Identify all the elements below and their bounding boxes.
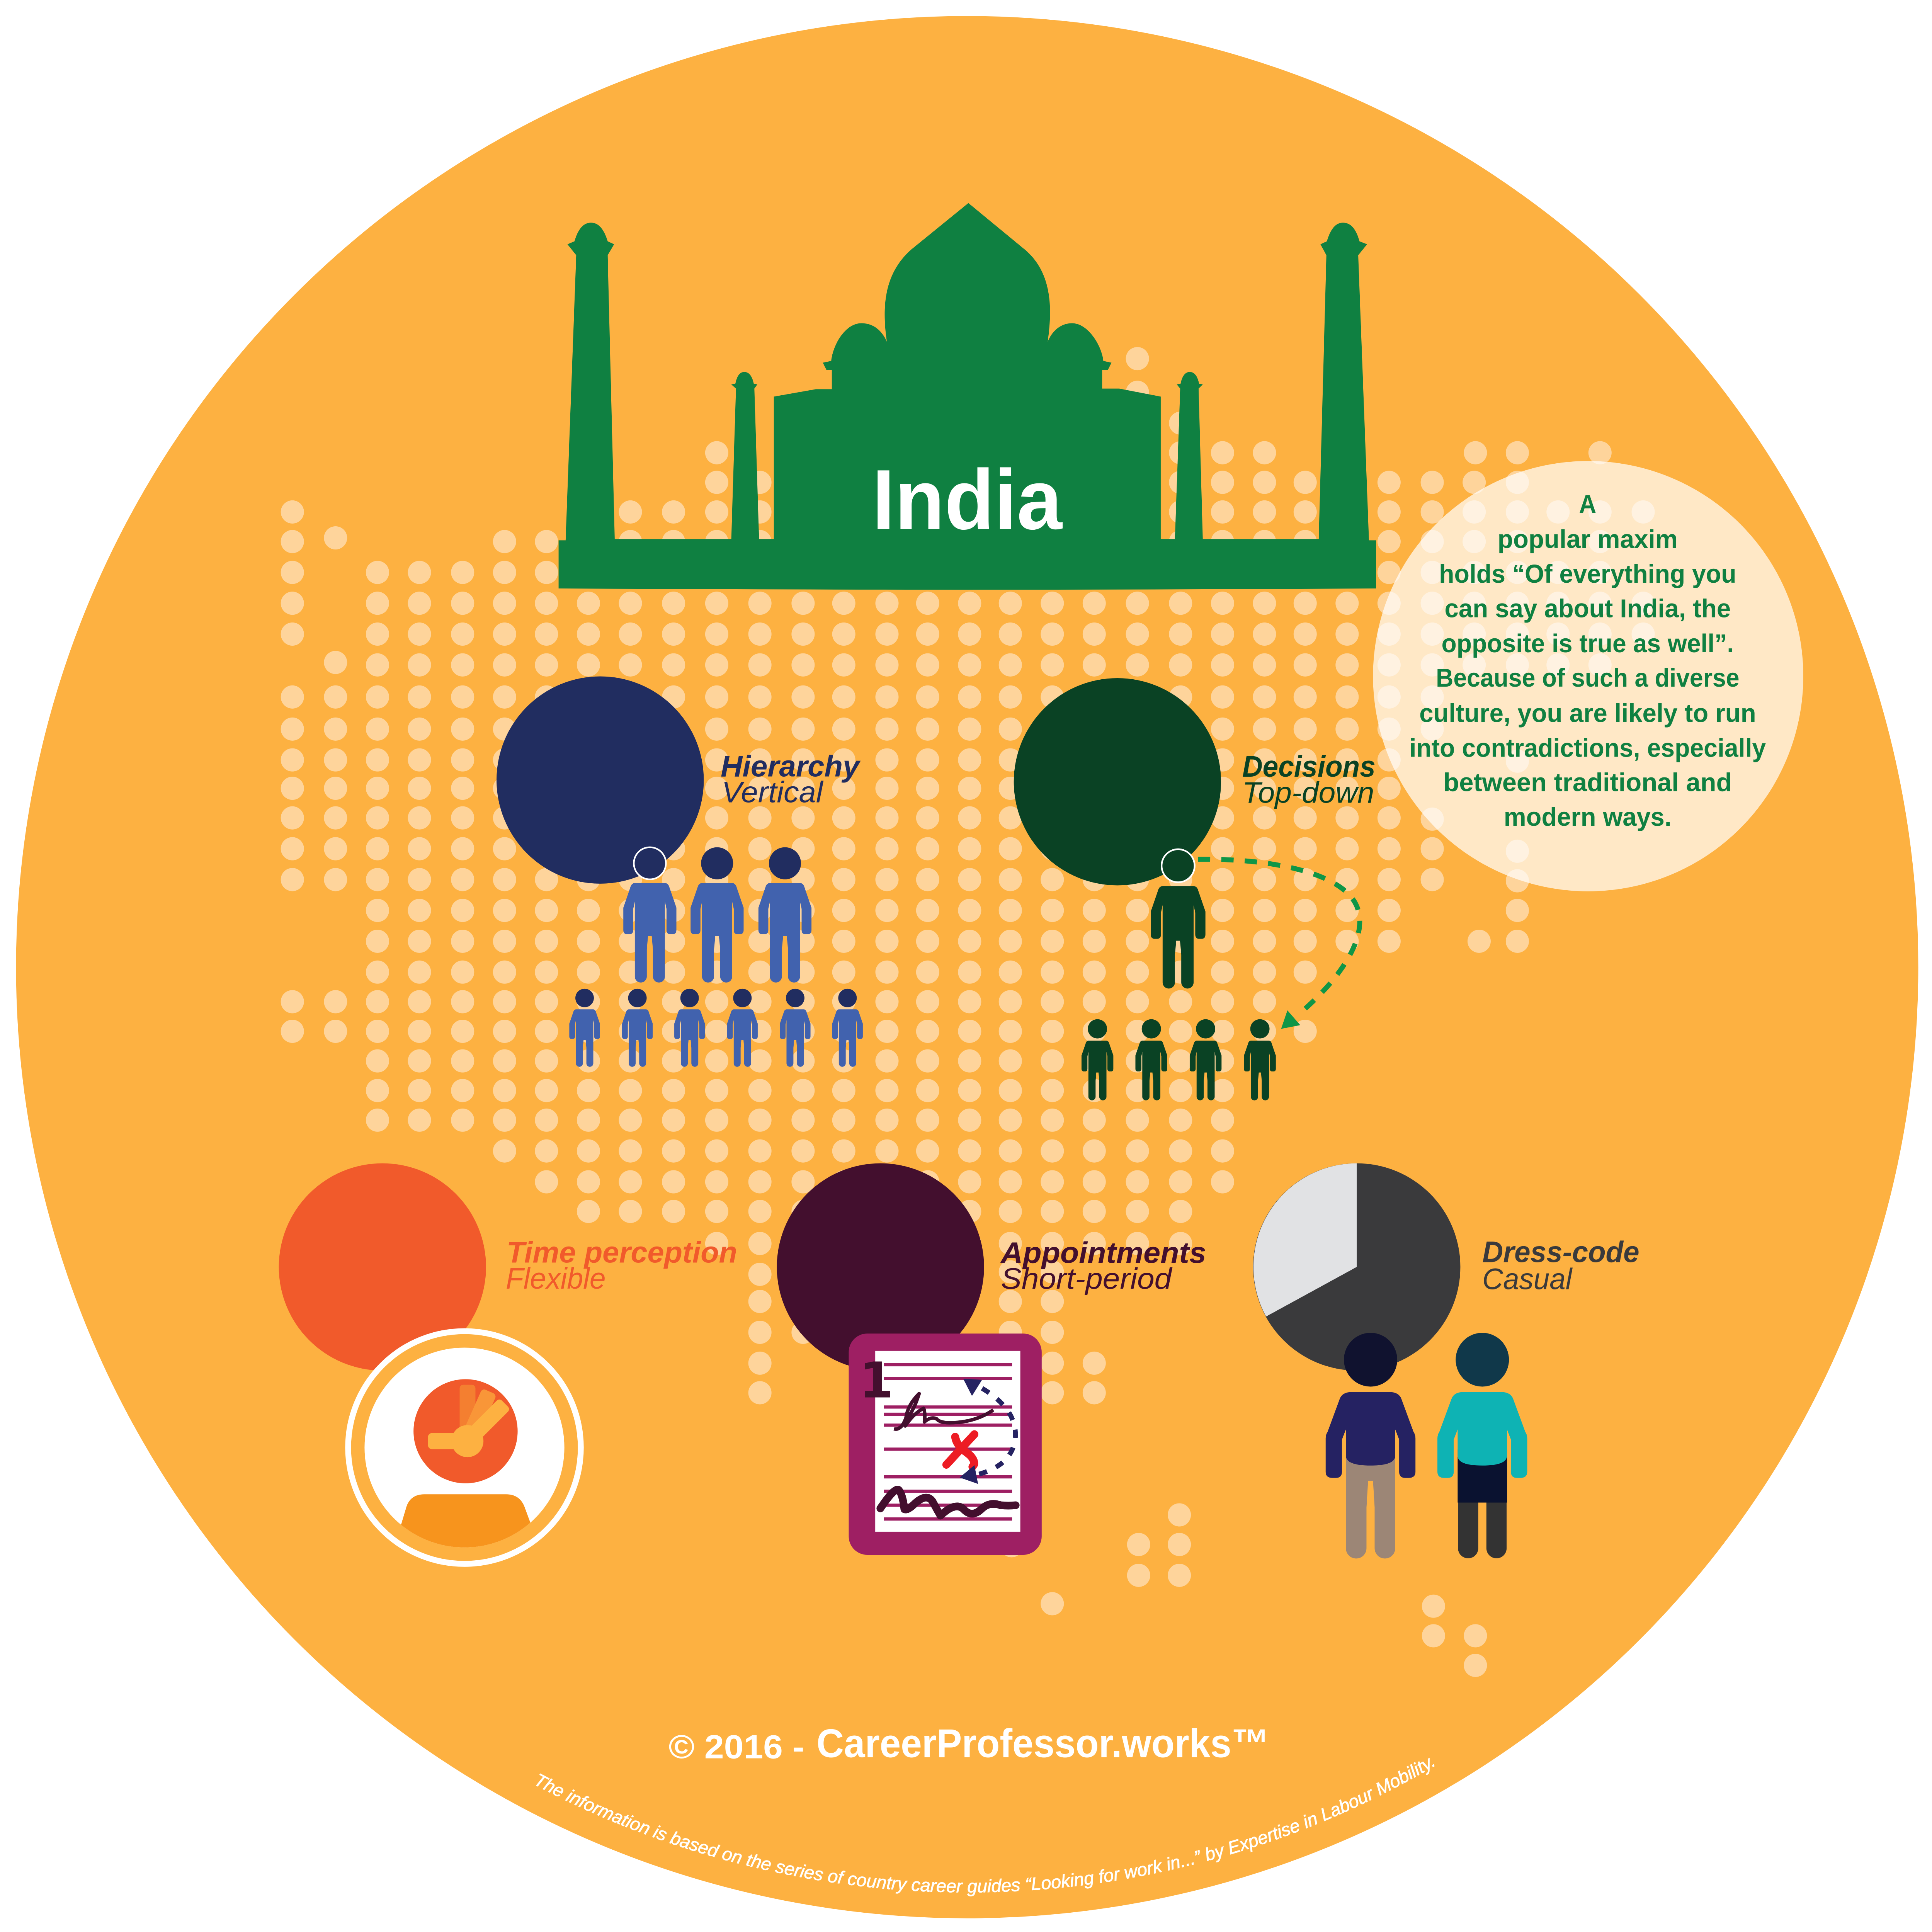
Taj Mahal silhouette — [559, 203, 1376, 590]
six junior figures — [569, 989, 863, 1067]
callout: popular maxim: can say about India, the — [1445, 594, 1731, 623]
callout: popular maxim: popular maxim — [1498, 525, 1678, 554]
callout: popular maxim — [1373, 461, 1803, 891]
panel: hierarchy — [497, 677, 863, 1067]
panel: appointments — [777, 1163, 1206, 1555]
icon: agenda tablet: 1 — [859, 1352, 894, 1410]
time label: Time perception — [507, 1236, 737, 1269]
callout: popular maxim: between traditional and — [1443, 768, 1732, 797]
appointments label: Short-period — [1001, 1263, 1173, 1296]
panel: decisions — [1014, 678, 1376, 1100]
hierarchy circle — [497, 677, 704, 884]
callout: popular maxim: holds “Of everything you — [1439, 560, 1736, 588]
hierarchy label — [721, 750, 861, 809]
leader figure — [1151, 849, 1206, 988]
hierarchy label: Vertical — [722, 776, 824, 809]
appointments label — [1000, 1237, 1206, 1296]
team figures — [1082, 1019, 1276, 1100]
footer: curved source note: The information is based on the series of country career guides “Looking for work in...” by Expertise in Labour Mobility. — [531, 1751, 1439, 1896]
three senior figures — [623, 847, 811, 983]
decisions label: Decisions — [1242, 750, 1376, 783]
callout: popular maxim: into contradictions, especially — [1410, 733, 1766, 762]
dress-code label: Casual — [1482, 1263, 1573, 1296]
callout: popular maxim: opposite is true as well”. — [1442, 629, 1734, 658]
hierarchy label: Hierarchy — [721, 750, 861, 783]
decisions circle — [1014, 678, 1221, 885]
pie chart: dress-code — [1253, 1163, 1460, 1371]
appointments label: Appointments — [1000, 1237, 1206, 1270]
time label: Flexible — [506, 1262, 606, 1295]
decisions label: Top-down — [1242, 776, 1374, 809]
figure: man in casual clothes — [1326, 1333, 1415, 1558]
footer: copyright: © 2016 - — [668, 1728, 804, 1765]
panel: time perception — [279, 1163, 737, 1564]
time circle — [279, 1163, 486, 1371]
arrow: top-down decision — [1198, 859, 1360, 1029]
icon: clock badge — [348, 1331, 581, 1564]
callout: popular maxim: culture, you are likely to run — [1419, 699, 1756, 728]
appointments circle — [777, 1163, 984, 1371]
icon: agenda tablet — [849, 1333, 1042, 1555]
time label — [506, 1236, 737, 1295]
dress-code label — [1482, 1236, 1639, 1296]
decisions label — [1242, 750, 1376, 809]
panel: dress-code — [1253, 1163, 1639, 1558]
dotted map of India — [291, 359, 1645, 1665]
callout: popular maxim: Because of such a diverse — [1436, 663, 1740, 692]
callout: popular maxim: modern ways. — [1504, 803, 1672, 832]
callout: popular maxim: A — [1579, 490, 1596, 519]
title: India — [872, 452, 1063, 547]
dress-code label: Dress-code — [1482, 1236, 1639, 1269]
footer: copyright: CareerProfessor.works™ — [816, 1721, 1269, 1766]
figure: woman in casual clothes — [1437, 1333, 1527, 1558]
